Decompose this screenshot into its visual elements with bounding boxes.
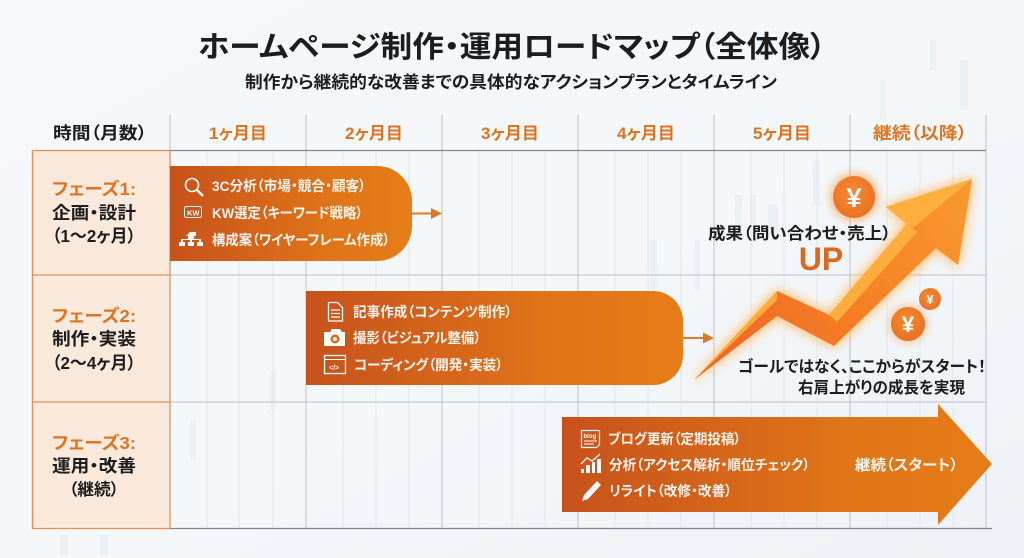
- arrow: phase 1: [412, 208, 442, 219]
- icon: blog: [582, 430, 600, 448]
- phase 3 label: [52, 433, 136, 499]
- icon: magnifier: [186, 178, 203, 196]
- panel: phase 1 bar: 3C分析（市場・競合・顧客）: [212, 178, 366, 194]
- icon: large yen coin: ¥: [846, 183, 862, 213]
- phase 1 label: [52, 179, 137, 246]
- phase 2 label: 制作・実装: [52, 329, 137, 349]
- panel: phase 2 bar: コーディング（開発・実装）: [354, 357, 503, 373]
- icon: document: [328, 302, 342, 321]
- icon: code window: </>: [329, 365, 339, 372]
- icon: pencil: [582, 481, 601, 501]
- icon: small yen coin: [919, 288, 941, 310]
- phase 2 label: [52, 306, 137, 373]
- panel: phase 2 bar: [306, 291, 714, 385]
- phase 3 label: （継続）: [69, 480, 119, 499]
- icon: small yen coin: ¥: [926, 292, 934, 307]
- panel: phase 2 bar: 記事作成（コンテンツ制作）: [353, 304, 512, 320]
- column headers: 5ヶ月目: [753, 124, 811, 143]
- callout: result up: 成果（問い合わせ・売上）: [708, 223, 891, 243]
- column headers: [53, 124, 967, 143]
- phase 3 label: 運用・改善: [52, 456, 136, 476]
- icon: medium yen coin: ¥: [902, 312, 915, 337]
- phase 1 label: 企画・設計: [52, 203, 137, 223]
- panel: phase 3 arrow bar: [562, 404, 992, 525]
- callout: goal message: 右肩上がりの成長を実現: [798, 378, 965, 397]
- column headers: 継続（以降）: [873, 124, 967, 143]
- callout: goal message: [738, 357, 986, 397]
- column headers: 時間（月数）: [53, 124, 147, 143]
- phase 2 label: フェーズ2:: [52, 306, 136, 326]
- panel: phase 3 arrow bar: ブログ更新（定期投稿）: [608, 431, 741, 447]
- title: ホームページ制作・運用ロードマップ（全体像）: [198, 31, 826, 64]
- column headers: 1ヶ月目: [209, 124, 267, 143]
- column headers: 2ヶ月目: [345, 124, 403, 143]
- callout: result up: [708, 223, 891, 277]
- phase 1 label: フェーズ1:: [52, 179, 136, 199]
- continuation label: 継続（スタート）: [855, 457, 958, 474]
- phase 1 label: （1〜2ヶ月）: [52, 226, 136, 246]
- callout: result up: UP: [799, 241, 843, 277]
- phase 3 label: フェーズ3:: [52, 433, 136, 453]
- icon: KW: [184, 206, 202, 218]
- icon: code window: [324, 356, 346, 374]
- arrow: phase 2: [683, 332, 714, 344]
- callout: goal message: ゴールではなく、ここからがスタート！: [738, 357, 986, 376]
- timetable grid: [170, 115, 992, 529]
- icon: blog: blog: [584, 434, 596, 440]
- panel: phase 3 arrow bar: 分析（アクセス解析・順位チェック）: [609, 457, 810, 473]
- icon: sitemap: [179, 232, 203, 246]
- panel: phase 1 bar: 構成案（ワイヤーフレーム作成）: [212, 232, 390, 248]
- arrow: growth: [694, 179, 972, 380]
- phase 2 label: （2〜4ヶ月）: [52, 353, 136, 373]
- column headers: 3ヶ月目: [481, 124, 539, 143]
- icon: large yen coin: [829, 172, 879, 222]
- icon: camera: [324, 329, 345, 346]
- icon: growth chart: [581, 454, 601, 473]
- panel: phase 1 bar: [170, 166, 442, 261]
- icon: medium yen coin: [888, 304, 928, 344]
- column headers: 4ヶ月目: [617, 124, 675, 143]
- subtitle: 制作から継続的な改善までの具体的なアクションプランとタイムライン: [245, 72, 777, 92]
- panel: phase 3 arrow bar: リライト（改修・改善）: [609, 483, 732, 499]
- panel: phase 2 bar: 撮影（ビジュアル整備）: [353, 330, 481, 346]
- icon: KW: KW: [187, 208, 200, 218]
- panel: phase labels: [32, 150, 170, 528]
- panel: phase 1 bar: KW選定（キーワード戦略）: [212, 205, 363, 221]
